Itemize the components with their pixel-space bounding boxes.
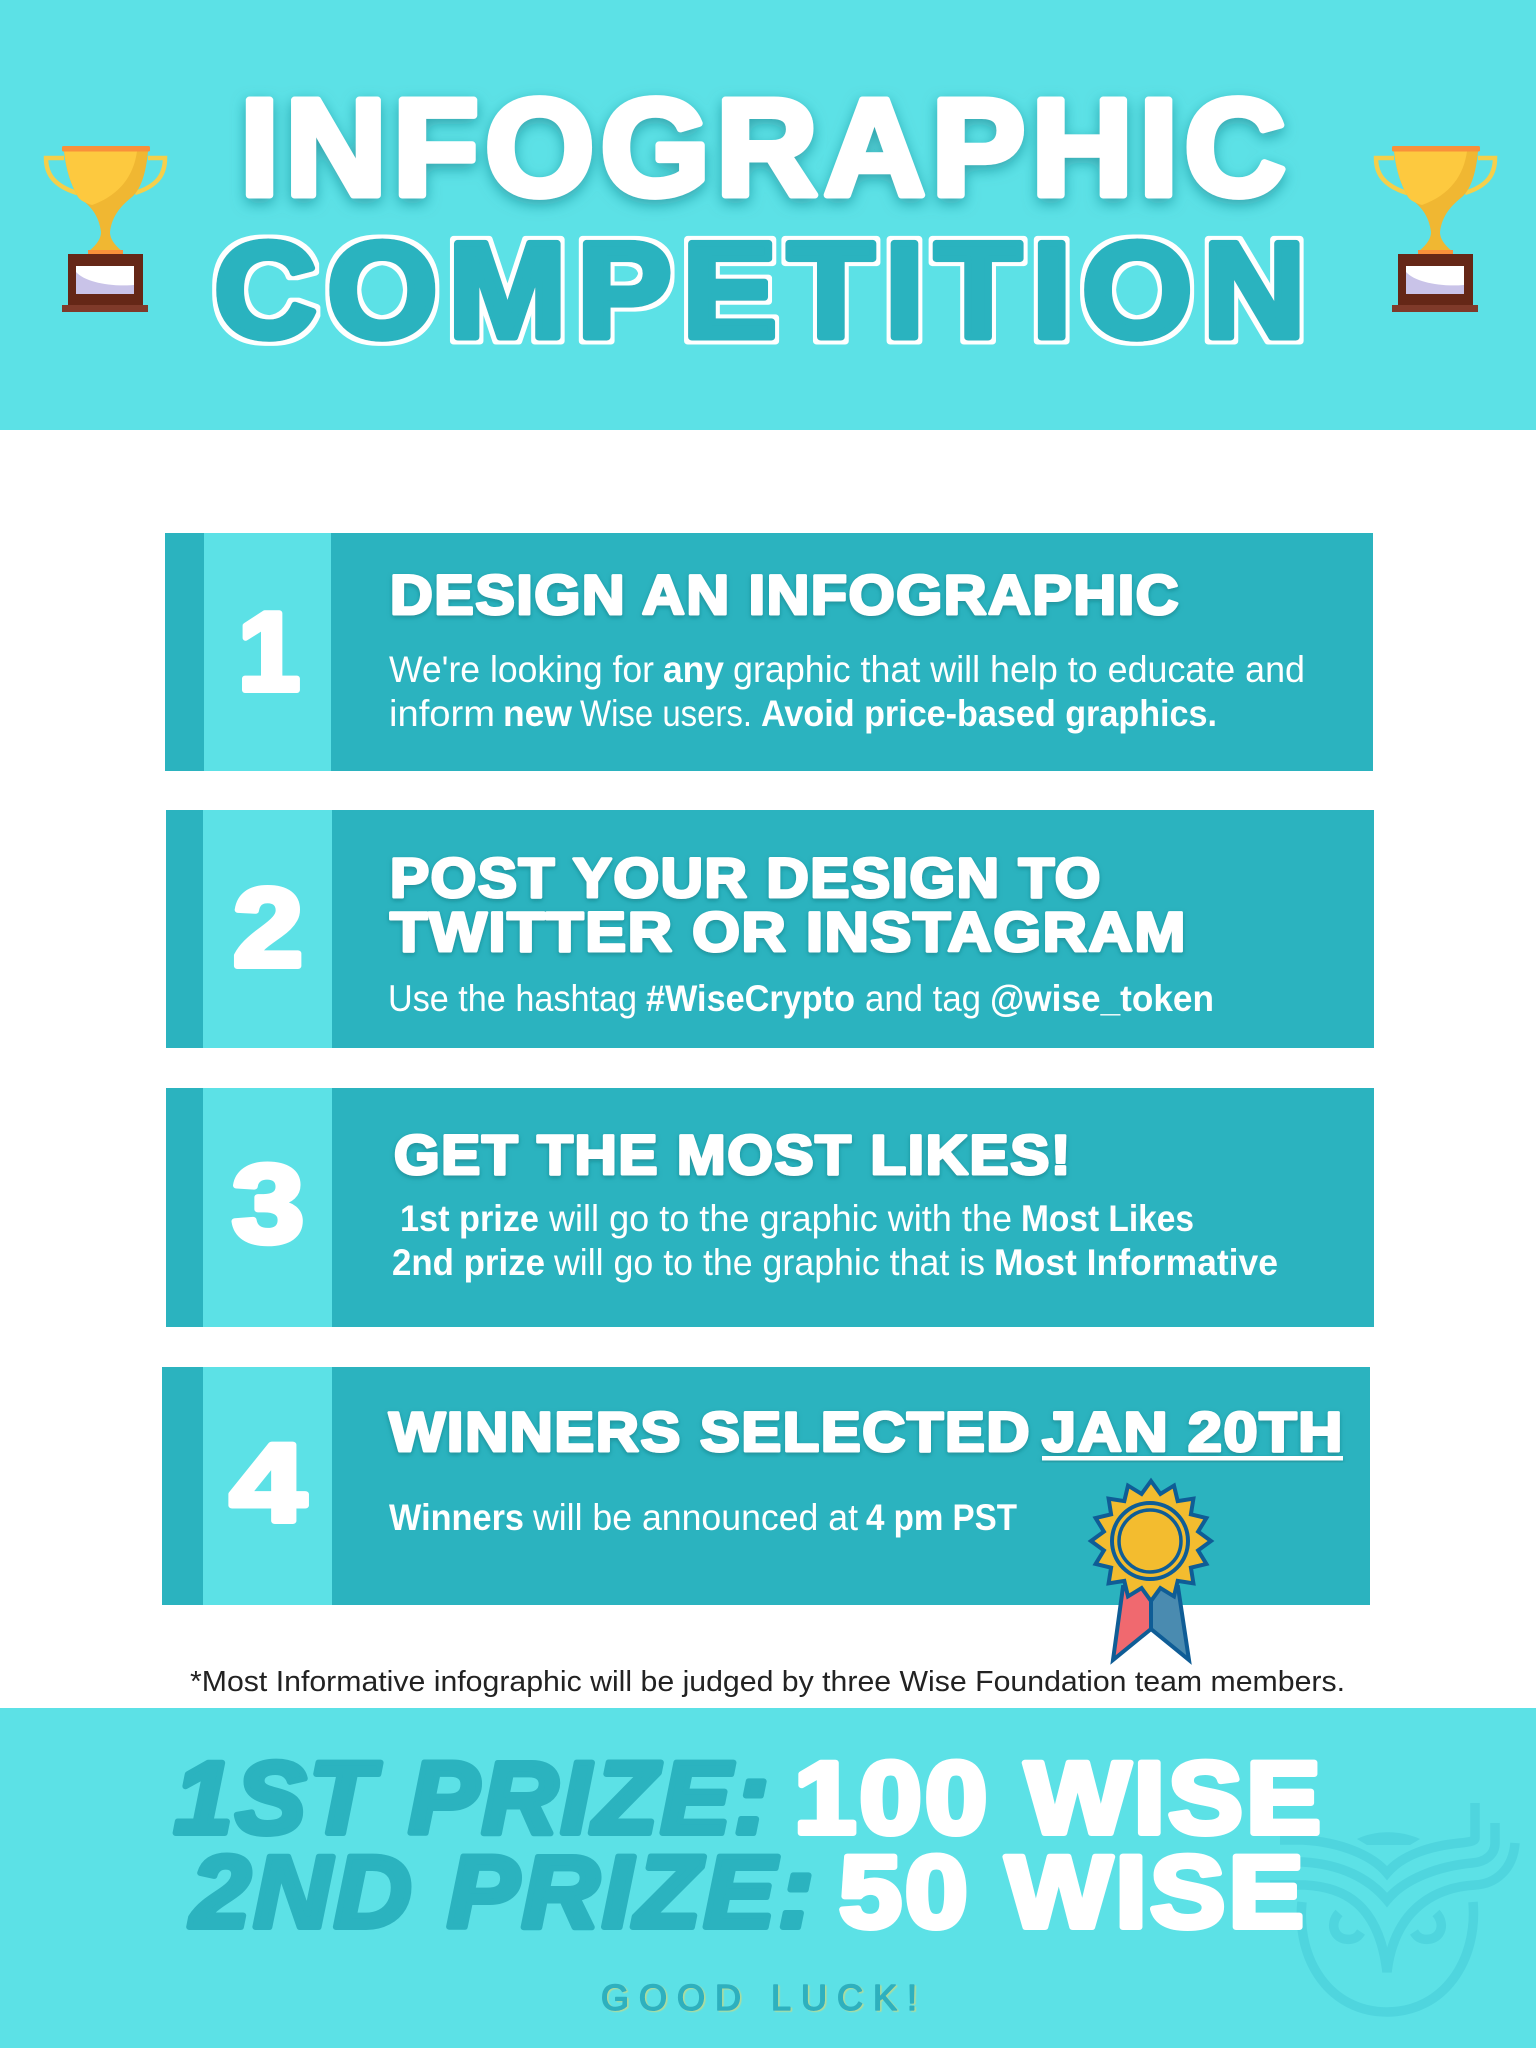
step 2 panel [166,810,1374,1048]
step 1 panel [165,533,1373,771]
heading: GET THE MOST LIKES! [394,1123,1072,1186]
title: COMPETITION: COMPETITION [214,214,1316,366]
second prize line: 2ND PRIZE: [189,1835,817,1949]
body text: and tag [865,978,981,1019]
body text: inform [389,693,495,734]
icon: left trophy [46,146,165,312]
body text [392,1198,1278,1283]
number 4: 4 [230,1421,306,1545]
body text: Wise users. [580,693,752,734]
body text: will go to the graphic that is [553,1242,985,1283]
heading: POST YOUR DESIGN TO [390,846,1102,909]
body text: Winners [389,1497,524,1538]
number 2: 2 [233,866,303,990]
body text [388,978,1214,1019]
heading: TWITTER OR INSTAGRAM [390,900,1187,963]
step 4 panel [162,1367,1370,1605]
header band [0,0,1536,430]
number 1: 1 [238,590,300,714]
first prize line: 100 WISE [794,1741,1324,1855]
body text: Most Likes [1021,1198,1194,1239]
second prize line: 50 WISE [839,1835,1307,1949]
heading [389,1400,1344,1463]
heading: WINNERS SELECTED [389,1400,1031,1463]
body text: will be announced at [532,1497,859,1538]
icon: owl watermark [1265,1803,1515,2012]
body text: any [663,649,724,690]
second prize line [189,1835,1307,1949]
body text: 1st prize [400,1198,539,1239]
icon: award ribbon [1091,1481,1211,1660]
body text: @wise_token [990,978,1214,1019]
body text: Use the hashtag [388,978,637,1019]
first prize line [174,1741,1324,1855]
footer band [0,1708,1536,2048]
body text: Most Informative [994,1242,1278,1283]
step 3 panel [166,1088,1374,1327]
heading: JAN 20TH [1042,1400,1344,1463]
title: INFOGRAPHIC: INFOGRAPHIC [240,71,1292,225]
body text: We're looking for [389,649,654,690]
body text: Avoid price-based graphics. [761,693,1217,734]
footnote: *Most Informative infographic will be judged by three Wise Foundation team members. [190,1666,1345,1698]
body text: 4 pm PST [866,1497,1017,1538]
body text: #WiseCrypto [646,978,855,1019]
body text [389,1497,1017,1538]
body text: graphic that will help to educate and [733,649,1305,690]
number 3: 3 [232,1142,304,1266]
heading: DESIGN AN INFOGRAPHIC [390,563,1180,626]
body text: will go to the graphic with the [548,1198,1012,1239]
body text [389,649,1305,734]
first prize line: 1ST PRIZE: [174,1741,772,1855]
icon: right trophy [1376,146,1495,312]
body text: new [503,693,572,734]
body text: 2nd prize [392,1242,545,1283]
heading [390,846,1187,963]
good luck: GOOD LUCK! [601,1977,917,2018]
